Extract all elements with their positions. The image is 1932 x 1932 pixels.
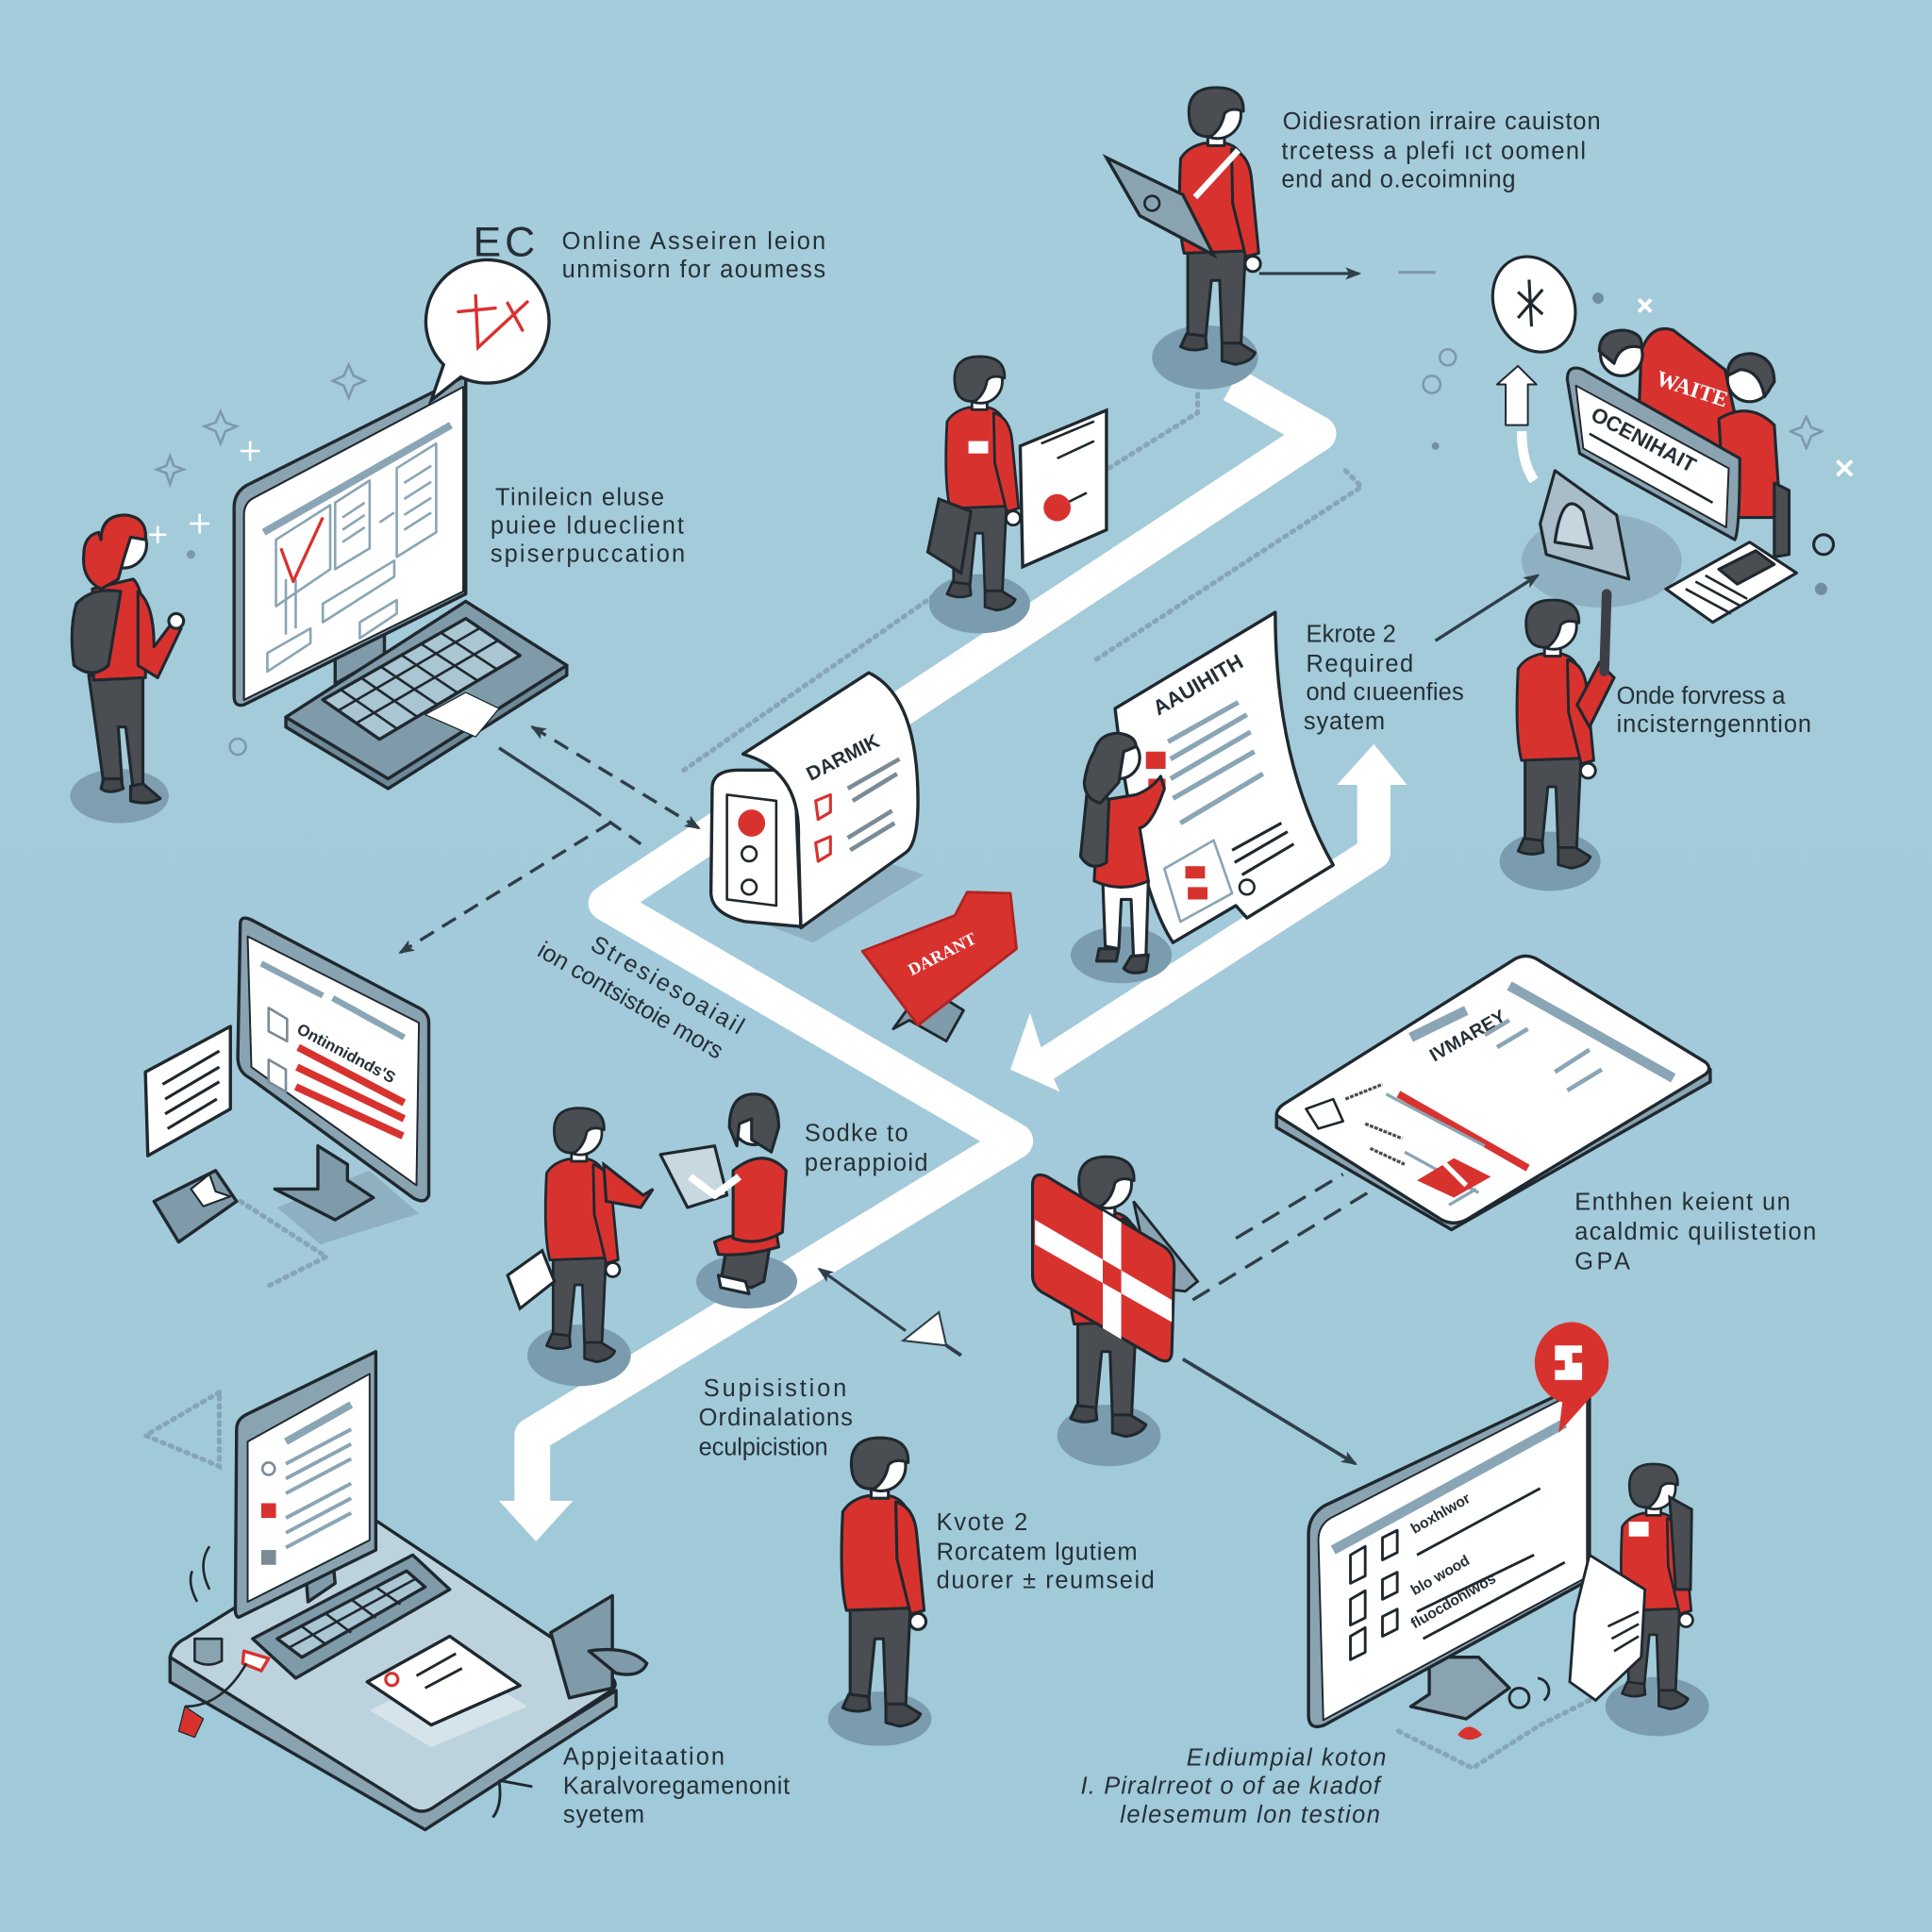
dotted guide lines [145,391,1590,1768]
monitor [306,1558,335,1602]
laptop [1107,158,1214,255]
side note [145,1026,230,1156]
label: application system [563,1743,790,1828]
label: academic GPA [1574,1190,1816,1274]
label: bottom-right italic [1080,1745,1386,1828]
label: kvote [937,1509,1155,1594]
label: application system: Karalvoregamenonit [563,1774,790,1800]
dashed connectors to tablet [1192,1174,1368,1300]
white flow path: return arrow [1010,744,1407,1091]
panel: bottom-right monitor: fluocdohlwos [1408,1571,1499,1632]
person: student with bag [1570,1464,1709,1736]
icon: asterisk badge [1477,243,1591,366]
label: required system: Required [1306,651,1413,677]
label: required system: ond cıueenfies [1306,679,1464,706]
speaker [551,1595,612,1698]
label: orientation [1281,108,1601,193]
keyboard [286,665,567,789]
panel: bottom-right monitor: blo wood [1408,1553,1473,1599]
label: timeline: Tinileicn eluse [495,485,664,511]
scroll document: DARMIK [803,730,883,786]
label: kvote: Rorcatem lgutiem [937,1540,1138,1566]
label: rotated note: ion contsistoie mors [533,937,727,1064]
red board [1639,328,1738,475]
white flow path: main route [499,385,1319,1541]
label: orientation: end and o.ecoimning [1281,167,1516,193]
gift box [154,1171,237,1242]
people behind [1601,334,1642,375]
label: required system: syatem [1304,708,1385,735]
panel: middle-left monitor [145,918,429,1244]
label: sodke [805,1120,928,1176]
person: standing man with folder [508,1108,653,1386]
label: timeline: spiserpuccation [491,541,685,568]
label: academic GPA: acaldmic quilistetion [1574,1219,1816,1245]
keypad [1666,542,1796,623]
second machine [1541,471,1629,579]
label: orientation: Oidiesration irraire cauiston [1283,108,1601,135]
red sign [862,892,1017,1041]
scroll document [711,673,924,942]
sparkles [1424,349,1823,448]
label: bottom-right italic: Eıdiumpial koton [1187,1745,1386,1772]
arrows between scroll and computers [400,727,699,953]
label: timeline: puiee ldueclient [491,513,684,540]
panel: middle-left monitor: Ontinnidnds'S [294,1020,398,1087]
red sign: DARANT [905,929,979,979]
cup and cables [194,1639,222,1665]
tablet: summary [1276,956,1710,1230]
person: standing man (Kvote) [828,1438,931,1746]
panel: bottom-right monitor: boxhlwor [1408,1491,1474,1538]
icon: red chat bubble [1535,1323,1608,1433]
tablet: summary: IVMAREY [1426,1007,1509,1066]
up arrow [1497,366,1537,425]
label: supplication [699,1375,853,1461]
cable and red drop [1457,1678,1549,1740]
small arrow with triangle [820,1269,961,1356]
person: student with red hair and backpack [70,515,184,823]
label: online assessment: unmisorn for aoumess [562,257,825,283]
arrow to machine [1436,575,1538,641]
label: supplication: eculpicistion [699,1435,828,1461]
arrow [1259,273,1436,274]
big application document [1115,612,1333,942]
person: student with card and bag [928,357,1107,633]
label: rotated note: Stresiesoaiail [586,931,749,1040]
icon: scribbled letters: EC [474,220,535,266]
person: girl reading document [1071,733,1172,983]
label: kvote: Kvote 2 [937,1509,1027,1536]
label: academic GPA: GPA [1574,1248,1630,1274]
panel: bottom-left desk with computer [170,1352,647,1830]
label: required system: Ekrote 2 [1306,621,1396,647]
monitor [1567,368,1740,540]
label: kvote: duorer ± reumseid [937,1568,1155,1594]
person: man with red flag shield [1033,1157,1198,1466]
paper [370,1666,527,1747]
keyboard [253,1555,450,1678]
label: sodke: perappioid [805,1150,928,1176]
label: sodke: Sodke to [805,1120,908,1146]
arrow to monitor [1183,1359,1356,1464]
label: application system: syetem [563,1802,644,1828]
big application document: AAUIHITH [1149,650,1247,720]
panel: top-right team at computer: OCENIHAIT [1588,402,1700,477]
label: bottom-right italic: I. Piralrreot o of ae kıadof [1080,1774,1383,1800]
panel: top-right team at computer [1424,243,1852,623]
label: orientation: trcetess a plefi ıct oomenl [1281,138,1586,164]
label: online forms [1617,683,1811,738]
label: supplication: Ordinalations [699,1405,853,1431]
label: timeline [491,485,685,568]
icon: speech bubble with handwriting [425,259,549,400]
bag [928,499,971,573]
sparkles top-left [149,365,365,755]
label: required system [1304,621,1464,735]
label: supplication: Supisistion [704,1375,846,1402]
person: student with laptop [1107,88,1260,390]
person: student raising tool [1500,594,1614,891]
label: online assessment [562,228,825,283]
panel: bottom-right monitor [1308,1380,1590,1726]
label: application system: Appjeitaation [563,1743,724,1770]
label: academic GPA: Enthhen keient un [1574,1190,1790,1216]
chart on screen [267,443,436,672]
card [1020,410,1107,567]
label: online forms: incisterngenntion [1617,711,1811,738]
label: online assessment: Online Asseiren leion [562,228,825,255]
label: bottom-right italic: lelesemum lon testion [1120,1802,1380,1828]
panel: top-right team at computer: WAITE [1653,366,1731,412]
panel: top-left computer [234,375,567,789]
person: seated woman with tablet [660,1094,797,1308]
label: online forms: Onde forvress a [1617,683,1786,709]
